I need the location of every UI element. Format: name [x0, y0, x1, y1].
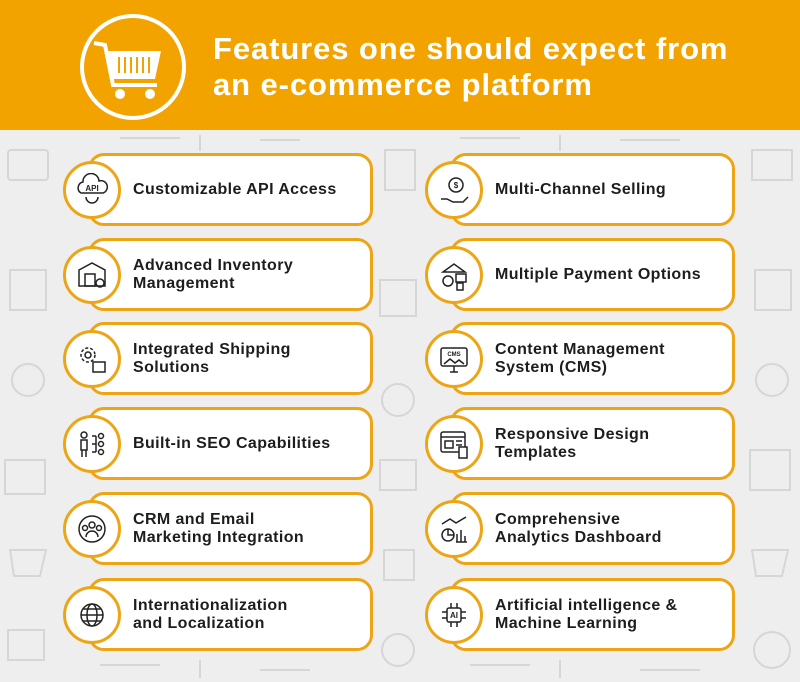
card: Responsive Design Templates	[425, 407, 735, 480]
header band	[0, 0, 800, 130]
icon: payments	[425, 246, 483, 304]
card: Artificial intelligence & Machine Learning: Artificial intelligence &	[495, 596, 677, 614]
title: Features one should expect from	[213, 31, 728, 66]
icon: people	[63, 500, 121, 558]
card: CRM and Email Marketing Integration: CRM and Email	[133, 510, 255, 528]
card: Internationalization and Localization: and Localization	[133, 614, 265, 632]
card: Advanced Inventory Management: Advanced Inventory	[133, 256, 293, 274]
card: Comprehensive Analytics Dashboard: Analytics Dashboard	[495, 528, 662, 546]
title: an e-commerce platform	[213, 67, 593, 102]
card: Multi-Channel Selling: Multi-Channel Selling	[495, 180, 666, 198]
card: Integrated Shipping Solutions: Solutions	[133, 358, 209, 376]
card: Content Management System (CMS): System (CMS)	[495, 358, 607, 376]
card: Comprehensive Analytics Dashboard	[425, 492, 735, 565]
card: Built-in SEO Capabilities	[63, 407, 373, 480]
icon: warehouse	[63, 246, 121, 304]
icon: analytics	[425, 500, 483, 558]
icon: monitor CMS: CMS	[447, 352, 461, 358]
card: Content Management System (CMS): Content Management	[495, 340, 665, 358]
icon: globe	[63, 586, 121, 644]
card: Internationalization and Localization	[63, 578, 373, 651]
card: Customizable API Access	[63, 153, 373, 226]
card: Multiple Payment Options	[425, 238, 735, 311]
card: Artificial intelligence & Machine Learning	[425, 578, 735, 651]
card: Artificial intelligence & Machine Learning: Machine Learning	[495, 614, 637, 632]
card: Internationalization and Localization: Internationalization	[133, 596, 288, 614]
icon: monitor CMS	[425, 330, 483, 388]
card: Built-in SEO Capabilities: Built-in SEO Capabilities	[133, 434, 331, 452]
card: Responsive Design Templates: Responsive Design	[495, 426, 649, 442]
card: CRM and Email Marketing Integration	[63, 492, 373, 565]
card: Customizable API Access: Customizable API Access	[133, 180, 337, 198]
card: Content Management System (CMS)	[425, 322, 735, 395]
title	[213, 31, 728, 102]
icon: gear puzzle	[63, 330, 121, 388]
card: Integrated Shipping Solutions	[63, 322, 373, 395]
icon: API: API	[85, 184, 99, 193]
icon: AI chip: AI	[450, 611, 458, 620]
card: CRM and Email Marketing Integration: Marketing Integration	[133, 528, 304, 546]
icon: hand coin	[425, 161, 483, 219]
icon: layout	[425, 415, 483, 473]
card: Advanced Inventory Management: Management	[133, 274, 235, 292]
icon: hand coin: $	[454, 181, 459, 190]
card: Advanced Inventory Management	[63, 238, 373, 311]
card: Comprehensive Analytics Dashboard: Comprehensive	[495, 510, 620, 528]
card: Multi-Channel Selling	[425, 153, 735, 226]
card: Integrated Shipping Solutions: Integrated Shipping	[133, 340, 291, 358]
icon: SEO person	[63, 415, 121, 473]
icon: AI chip	[425, 586, 483, 644]
card: Multiple Payment Options: Multiple Payment Options	[495, 266, 701, 282]
card: Responsive Design Templates: Templates	[495, 444, 577, 460]
icon: shopping cart	[80, 14, 186, 120]
icon: API	[63, 161, 121, 219]
